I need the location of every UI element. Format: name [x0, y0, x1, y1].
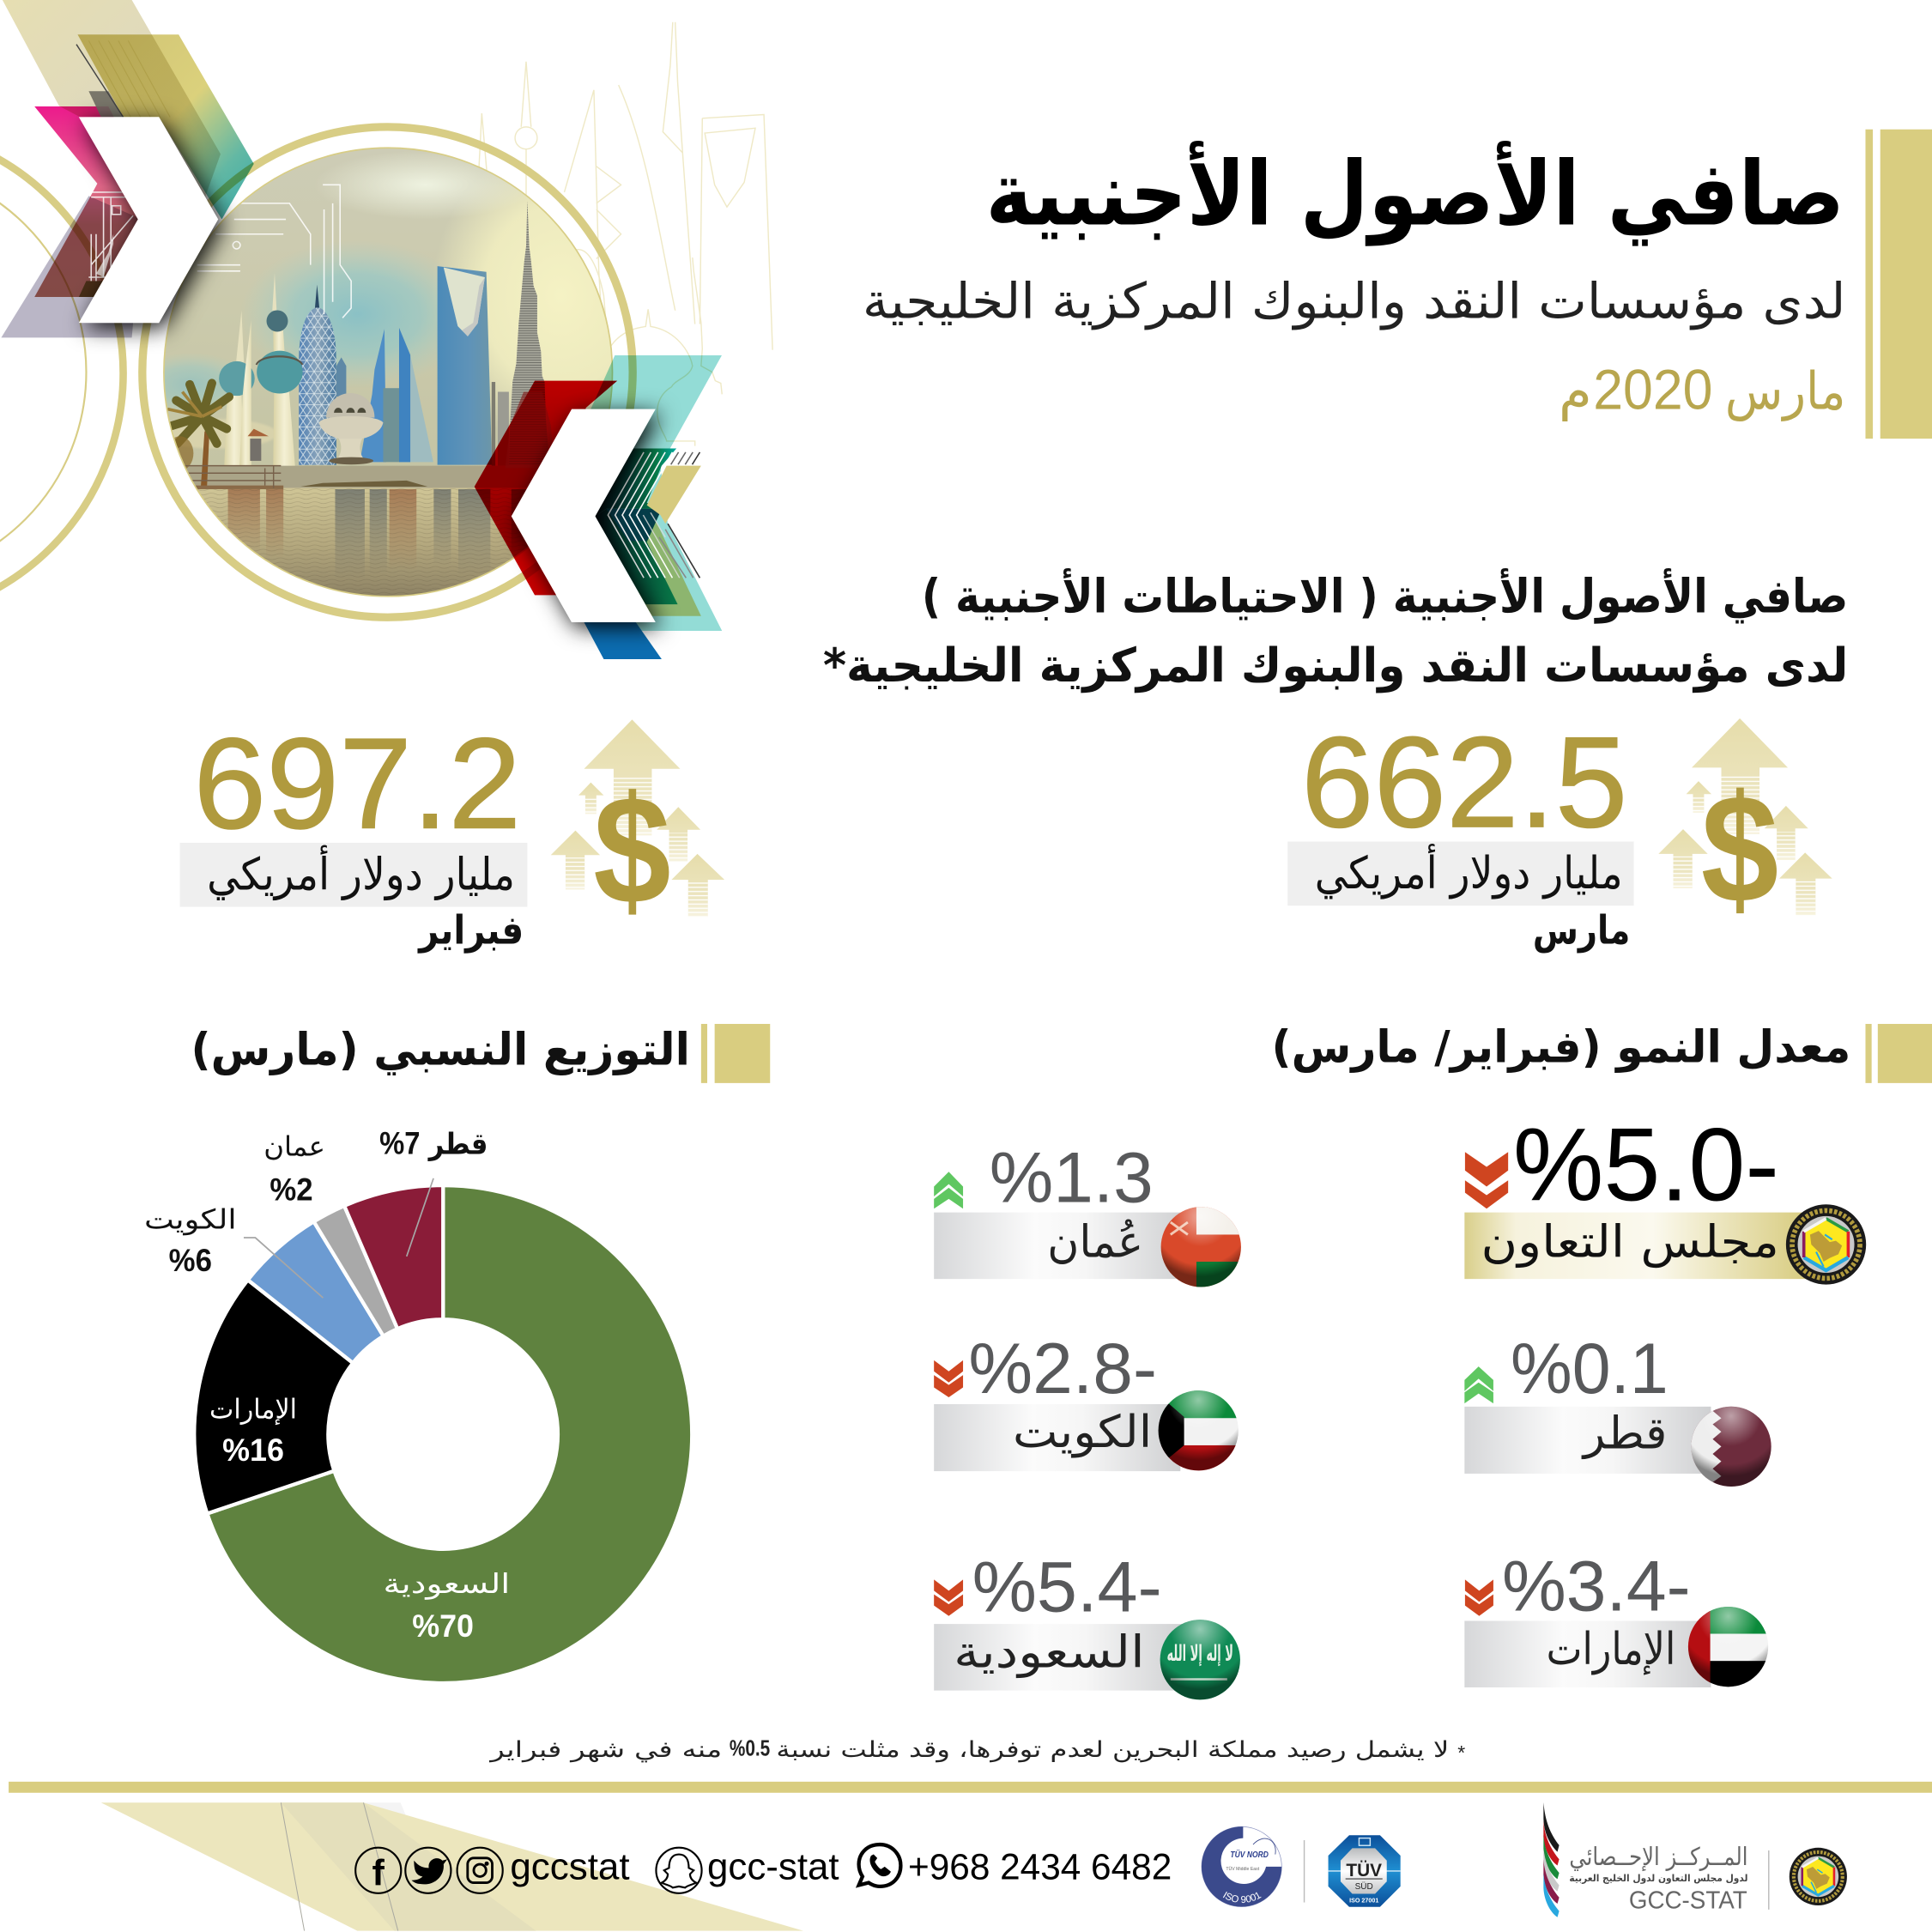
logo: GCC-Stat: [1543, 1802, 1748, 1917]
growth: Kuwait: الكويت: [1013, 1407, 1152, 1458]
burj khalifa: [509, 201, 549, 466]
logo: TUV SUD: ISO 27001: [1349, 1898, 1378, 1905]
growth: UAE: الإمارات: [1547, 1624, 1675, 1675]
growth: UAE: [1464, 1560, 1768, 1687]
growth: Kuwait: [934, 1342, 1239, 1471]
icon: rising arrows with dollar: [551, 719, 724, 936]
white chevron right: [512, 409, 656, 622]
skyline line drawing: [463, 22, 772, 446]
label: UAE: [209, 1394, 297, 1468]
heading: growth rate: معدل النمو (فبراير/ مارس): [1272, 1021, 1850, 1073]
footer divider: [9, 1782, 1932, 1793]
growth: Saudi: [934, 1562, 1240, 1699]
logo: GCC-Stat: GCC-STAT: [1629, 1887, 1747, 1914]
horizon water band: [185, 465, 539, 488]
footnote: [488, 1737, 1465, 1764]
growth: Qatar: [1464, 1343, 1772, 1487]
logo: GCC-Stat: لدول مجلس التعاون لدول الخليج العربية: [1569, 1872, 1748, 1885]
kingdom tower: [438, 266, 492, 465]
growth: Oman: عُمان: [1047, 1216, 1143, 1268]
footnote: %0.5: [730, 1737, 770, 1761]
value: 697.2: [193, 712, 521, 856]
growth: Oman: %1.3: [990, 1138, 1154, 1218]
lattice tower: [299, 285, 346, 465]
section heading: net foreign assets: *لدى مؤسسات النقد والبنوك المركزية الخليجية: [823, 638, 1848, 693]
icon: UAE flag: [1687, 1607, 1768, 1687]
label: Kuwait: [144, 1204, 237, 1278]
jetty and island: [185, 466, 427, 489]
unit: مليار دولار أمريكي: [1315, 844, 1623, 899]
label: Oman: عمان: [263, 1132, 325, 1163]
footer decoration: [101, 1802, 803, 1931]
water: [197, 488, 529, 596]
label: Oman: [263, 1132, 325, 1207]
footnote: لا يشمل رصيد مملكة البحرين لعدم توفرها، وقد مثلت نسبة: [776, 1737, 1449, 1763]
growth: Qatar: قطر: [1581, 1408, 1667, 1460]
handle: gccstat: gccstat: [510, 1845, 630, 1887]
small towers: [492, 382, 509, 466]
growth: Kuwait: %2.8-: [968, 1329, 1157, 1408]
icon: Saudi flag: [1160, 1620, 1240, 1699]
month: مارس: [1533, 907, 1630, 954]
growth: GCC: %5.0-: [1513, 1106, 1779, 1222]
growth: Saudi: %5.4-: [972, 1547, 1162, 1627]
growth: GCC: [1464, 1106, 1866, 1285]
footnote: منه في شهر فبراير: [488, 1737, 722, 1763]
label: Kuwait: %6: [169, 1242, 212, 1278]
decorative arcs left: [0, 127, 124, 620]
growth: UAE: %3.4-: [1502, 1546, 1691, 1626]
section heading: net foreign assets: [823, 568, 1848, 693]
date: [1559, 358, 1846, 422]
handle: gcc-stat: gcc-stat: [707, 1845, 839, 1887]
subtitle: لدى مؤسسات النقد والبنوك المركزية الخليجية: [863, 272, 1846, 330]
label: UAE: الإمارات: [209, 1394, 297, 1425]
stat: March: [1287, 710, 1832, 954]
phone number: +968 2434 6482: [908, 1846, 1172, 1887]
palm tree: [167, 383, 229, 487]
date: م: [1559, 362, 1592, 422]
label: Saudi: %70: [412, 1608, 474, 1644]
footnote: *: [1457, 1741, 1465, 1764]
icon: Saudi flag: لا إله إلا الله: [1167, 1641, 1233, 1667]
icon: whatsapp: [859, 1844, 900, 1887]
section heading: net foreign assets: صافي الأصول الأجنبية ( الاحتياطات الأجنبية ): [922, 568, 1848, 623]
icon: rising arrows with dollar: [1658, 718, 1832, 936]
month: فبراير: [417, 907, 524, 954]
logo: TUV SUD: [1329, 1835, 1401, 1907]
growth: Qatar: %0.1: [1511, 1329, 1669, 1408]
icon: GCC emblem: [1786, 1204, 1866, 1285]
logo: TUV Nord: TÜV NORD: [1230, 1849, 1269, 1860]
heading: distribution: التوزيع النسبي (مارس): [191, 1024, 690, 1075]
label: Oman: %2: [270, 1171, 313, 1207]
donut chart: [144, 1125, 692, 1683]
photo ring: [142, 127, 633, 617]
label: UAE: %16: [222, 1432, 284, 1468]
label: Saudi: [383, 1569, 510, 1644]
label: Qatar: قطر: [427, 1128, 488, 1162]
social icons: [355, 1848, 503, 1893]
logo: GCC-Stat: المــركــز الإحــصائي: [1569, 1842, 1748, 1872]
label: Saudi: السعودية: [383, 1569, 510, 1600]
circuit lines: [197, 185, 351, 318]
icon: Oman flag: [1160, 1207, 1241, 1287]
icon: GCC emblem small: [1790, 1848, 1847, 1905]
bahrain wtc: [360, 328, 433, 462]
umbrella and buildings: [248, 429, 269, 461]
domed pavilion: [319, 393, 383, 464]
label: Qatar: %7: [379, 1125, 421, 1161]
logo: TUV Nord: TÜV Middle East: [1226, 1866, 1260, 1872]
logo: TUV SUD: TÜV: [1346, 1859, 1383, 1881]
social icons: f: [372, 1852, 385, 1893]
growth: Oman: [934, 1152, 1241, 1287]
icon: rising arrows with dollar: $: [1701, 764, 1778, 936]
top marker bar: [1865, 130, 1932, 439]
icon: rising arrows with dollar: $: [593, 765, 671, 936]
kuwait towers: [219, 273, 303, 468]
icon: snapchat: [656, 1848, 702, 1893]
value: 662.5: [1301, 710, 1627, 854]
label: Qatar: [379, 1125, 488, 1162]
logo: TUV SUD: SÜD: [1355, 1881, 1373, 1892]
icon: Kuwait flag: [1159, 1390, 1239, 1471]
stat: February: [180, 712, 724, 954]
unit: مليار دولار أمريكي: [207, 845, 515, 900]
date: 2020: [1593, 358, 1712, 421]
logo: TUV Nord: ISO 9001: [1222, 1892, 1262, 1904]
title: صافي الأصول الأجنبية: [985, 140, 1844, 245]
growth: GCC: مجلس التعاون: [1481, 1216, 1779, 1268]
photo: gulf skyline: [165, 148, 612, 596]
logo: TUV Nord: [1202, 1826, 1282, 1907]
left chevron group: [1, 0, 254, 337]
label: Kuwait: الكويت: [144, 1204, 237, 1235]
ribbon: [1543, 1802, 1560, 1917]
white chevron left: [79, 117, 218, 323]
icon: Qatar flag: [1691, 1406, 1772, 1487]
date: مارس: [1725, 362, 1846, 422]
right chevron group: [475, 355, 722, 659]
growth: Saudi: السعودية: [954, 1626, 1145, 1678]
